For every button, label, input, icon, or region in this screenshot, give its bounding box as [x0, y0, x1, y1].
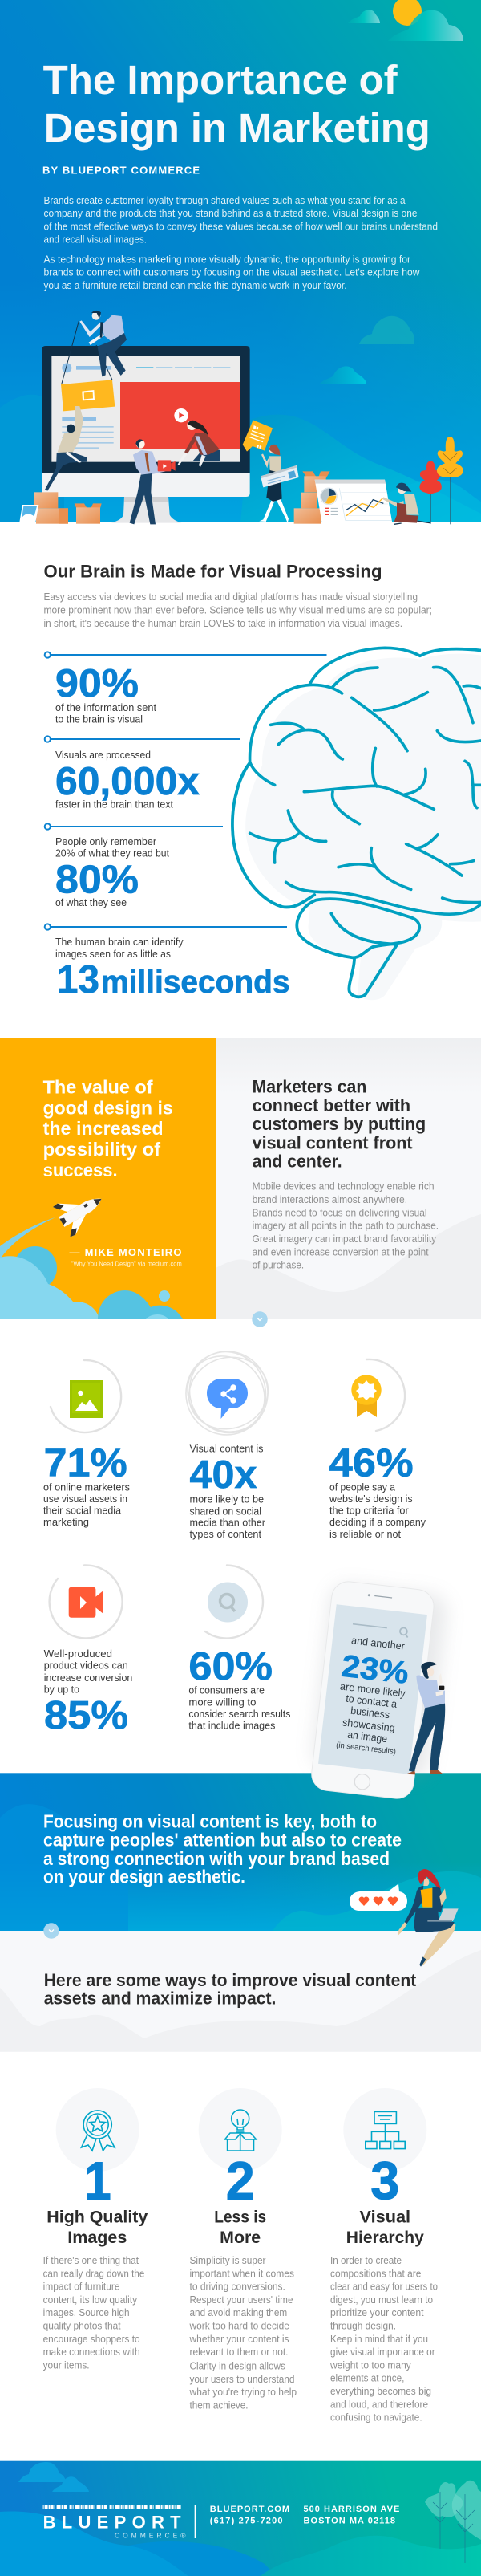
phone text: and another: [350, 1634, 406, 1652]
heading: assets and maximize impact.: [44, 1989, 276, 2009]
stat: 85%: [44, 1565, 132, 1737]
stat: 60%: [188, 1565, 291, 1732]
icon: sun: [393, 0, 422, 26]
phone text: (in search results): [336, 1741, 396, 1757]
tip body: and avoid making them: [189, 2306, 287, 2318]
stat: 80%: 20% of what they read but: [55, 847, 169, 859]
icon: rocket trail: [0, 1217, 55, 1259]
icon: video camera in ring: [50, 1565, 123, 1638]
panel: footer: [0, 2461, 481, 2576]
tip body: them achieve.: [189, 2399, 249, 2411]
stat: 71%: marketing: [43, 1516, 89, 1528]
contact: web and phone: [210, 2505, 289, 2525]
body: [253, 1180, 439, 1271]
figure: bearded man reaching: [45, 406, 87, 491]
callout text: on your design aesthetic.: [43, 1867, 245, 1887]
tip body: everything becomes big: [330, 2385, 431, 2397]
tip body: [329, 2254, 438, 2424]
tip title: [46, 2208, 148, 2247]
stat: 40x: media than other: [189, 1517, 266, 1529]
quote text: The value of: [43, 1077, 153, 1098]
contact: address: BOSTON MA 02118: [303, 2516, 395, 2525]
tip body: whether your content is: [189, 2333, 289, 2345]
figure: woman on laptop with hearts: [350, 1869, 459, 1967]
phone shadow: [312, 1583, 448, 1780]
figure: man leaning on phone: [406, 1662, 445, 1774]
illustration: woman, chart, trees: [243, 420, 463, 524]
tip body: compositions that are: [330, 2267, 421, 2279]
body: Great imagery can impact brand favorability: [253, 1233, 437, 1245]
body: of purchase.: [253, 1259, 304, 1271]
chart card: [315, 480, 392, 524]
tip body: make connections with: [43, 2346, 140, 2358]
tip body: digest, you must learn to: [330, 2294, 433, 2306]
contact: address: 500 HARRISON AVE: [303, 2505, 399, 2514]
text block: intro: you as a furniture retail brand can make this dynamic work in your favor.: [43, 279, 346, 291]
tip body: your items.: [43, 2359, 90, 2371]
tip body: Keep in mind that if you: [330, 2333, 428, 2345]
stat: 71%: of online marketers: [43, 1481, 130, 1493]
text block: brain intro: more prominent now than ever before. Science tells us why visual mediums are so popular;: [43, 603, 432, 616]
stat: 46%: deciding if a company: [329, 1516, 426, 1528]
stat: 60,000x: [45, 736, 240, 811]
stat: 80%: [45, 823, 223, 908]
heading: brain section: Our Brain is Made for Visual Processing: [43, 561, 382, 581]
stat: 40x: shared on social: [189, 1505, 261, 1517]
stat: 40x: Visual content is: [189, 1442, 264, 1454]
body: brand interactions almost anywhere.: [253, 1193, 407, 1205]
figure: woman kneeling: [178, 421, 220, 467]
stat: 13 milliseconds: images seen for as little as: [55, 948, 171, 960]
stat: 13 milliseconds: 13: [57, 958, 99, 1002]
callout text: a strong connection with your brand based: [43, 1848, 390, 1869]
tip body: elements at once,: [330, 2372, 404, 2384]
icon: hierarchy: [366, 2111, 405, 2149]
tip body: prioritize your content: [330, 2306, 424, 2318]
text block: intro: brands to connect with customers by focusing on the visual aesthetic. Let's explore how: [43, 266, 420, 278]
tip body: can really drag down the: [43, 2267, 144, 2279]
text block: brain intro: Easy access via devices to social media and digital platforms has made visual storytelling: [43, 591, 418, 603]
panel: improve heading: [0, 1923, 481, 2052]
icon: red video panel: [120, 382, 240, 449]
illustration: brain: [232, 648, 481, 1000]
tip body: encourage shoppers to: [43, 2333, 140, 2345]
icon: monitor: [42, 346, 250, 497]
tip body: In order to create: [330, 2254, 402, 2266]
tip 2: less is more: 2: [226, 2151, 255, 2212]
tip body: Clarity in design allows: [189, 2360, 285, 2372]
tip title: Hierarchy: [346, 2229, 424, 2247]
icon: share bubble in scribble: [172, 1340, 280, 1448]
icon: footer plants: [425, 2481, 481, 2563]
stat: 60,000x: 60,000x: [55, 760, 200, 803]
tip title: [214, 2208, 266, 2247]
stat: 46%: the top criteria for: [329, 1505, 409, 1517]
title: The Importance of: [43, 57, 398, 103]
tip body: [189, 2254, 297, 2411]
tip title: [346, 2208, 424, 2247]
stat: 85%: 85%: [44, 1694, 128, 1737]
stat: 46%: of people say a: [329, 1481, 396, 1493]
stat: 80%: of what they see: [55, 896, 127, 908]
stat: 85%: product videos can: [44, 1659, 128, 1671]
stat: 46%: is reliable or not: [329, 1528, 401, 1540]
icon: monitor stand: [111, 497, 182, 523]
tip body: your users to understand: [189, 2373, 295, 2385]
stat: 46%: [329, 1359, 426, 1540]
stat: 85%: Well-produced: [44, 1648, 112, 1660]
stat: 80%: People only remember: [55, 835, 157, 847]
figure: man on top of monitor: [79, 311, 127, 376]
stat: 85%: increase conversion: [44, 1672, 132, 1684]
icon: cloud top large: [388, 10, 463, 41]
phone text: are more likely: [339, 1680, 406, 1700]
icon: cloud mid lower: [319, 366, 366, 384]
figure: man with camera: [130, 439, 176, 524]
stat: 40x: [172, 1340, 280, 1540]
stat: 40x: 40x: [189, 1453, 257, 1497]
icon: award: [82, 2111, 115, 2151]
quote text: good design is: [43, 1098, 173, 1119]
phone text: showcasing: [342, 1716, 396, 1734]
tip body: content, its low quality: [43, 2294, 138, 2306]
panel: marketers: [216, 1038, 481, 1327]
tip body: weight to too many: [329, 2359, 411, 2371]
figure: woman with card: [259, 445, 299, 523]
text block: brain intro: in short, it's because the human brain LOVES to take in information via visual images.: [43, 617, 402, 629]
stat: 71%: [43, 1360, 130, 1528]
phone text: business: [350, 1704, 390, 1721]
tip body: confusing to navigate.: [330, 2411, 422, 2424]
stat: 60%: more willing to: [188, 1696, 256, 1708]
callout text: [43, 1810, 402, 1887]
stat: 90%: of the information sent: [55, 701, 156, 713]
tip body: Respect your users' time: [189, 2294, 293, 2306]
figure: seated woman: [382, 483, 430, 524]
quote text: [43, 1077, 173, 1180]
tip body: quality photos that: [43, 2319, 121, 2332]
heading: customers by putting: [253, 1114, 426, 1134]
icon: stacked boxes: [34, 492, 68, 524]
illustration: monitor with people: [19, 311, 250, 524]
icon: yellow quote bubble: [243, 420, 273, 452]
icon: search in ring: [205, 1565, 263, 1638]
tip body: through design.: [330, 2319, 396, 2332]
text block: intro: and recall visual images.: [43, 233, 147, 246]
stat: 90%: 90%: [55, 662, 139, 705]
stat: 60%: consider search results: [188, 1708, 291, 1720]
heading: connect better with: [253, 1095, 410, 1115]
callout text: Focusing on visual content is key, both to: [43, 1810, 377, 1831]
phone with stat: [309, 1580, 448, 1800]
icon: medal in ring: [351, 1359, 405, 1431]
callout text: capture peoples' attention but also to create: [43, 1830, 402, 1851]
phone text: an image: [347, 1729, 388, 1745]
icon: chevron button: [43, 1923, 59, 1939]
contact: web and phone: (617) 275-7200: [210, 2516, 282, 2525]
tip body: images. Source high: [43, 2306, 130, 2318]
quote text: the increased: [43, 1118, 164, 1139]
icon: cloud top small: [348, 10, 380, 23]
attribution: "Why You Need Design" via medium.com: [71, 1260, 182, 1268]
tip title: High Quality: [46, 2208, 148, 2227]
stat: 40x: more likely to be: [189, 1493, 264, 1505]
tip title: Visual: [360, 2208, 410, 2227]
byline: BY BLUEPORT COMMERCE: [42, 165, 200, 177]
text block: intro: As technology makes marketing more visually dynamic, the opportunity is growing for: [43, 254, 411, 266]
logo: Blueport Commerce: COMMERCE®: [115, 2531, 186, 2539]
tip body: to driving conversions.: [189, 2281, 285, 2293]
heading: visual content front: [253, 1133, 413, 1153]
logo: Blueport Commerce: BLUEPORT: [43, 2512, 181, 2532]
brain outline upper: [236, 648, 481, 914]
heading: and center.: [253, 1151, 342, 1172]
tip body: relevant to them or not.: [189, 2346, 289, 2358]
attribution: — MIKE MONTEIRO: [69, 1246, 181, 1258]
body: Mobile devices and technology enable rich: [253, 1180, 435, 1193]
stat: 80%: 80%: [55, 859, 139, 902]
icon: red leaf tree: [420, 461, 442, 524]
stat: 46%: website's design is: [329, 1493, 413, 1505]
text block: brain intro: [43, 591, 432, 629]
stat: 13 milliseconds: [45, 924, 289, 1002]
tip body: clear and easy for users to: [330, 2281, 438, 2293]
phone text: [332, 1633, 412, 1757]
stat: 46%: 46%: [329, 1441, 414, 1485]
brain fill: [245, 654, 481, 1000]
icon: chevron button: [252, 1311, 268, 1327]
tip title: Images: [67, 2229, 127, 2247]
panel: quote: [0, 1038, 216, 1319]
icon: clouds: [0, 1246, 183, 1319]
tip 2: less is more: [189, 2088, 297, 2411]
icon: open box: [75, 503, 102, 524]
contact: web and phone: BLUEPORT.COM: [210, 2505, 289, 2514]
tip 3: visual hierarchy: 3: [370, 2151, 399, 2212]
stat: 71%: 71%: [44, 1441, 127, 1485]
text block: intro: of the most effective ways to convey these values because of how well our brains understand: [43, 220, 438, 233]
contact: address: [303, 2505, 399, 2525]
tip body: impact of furniture: [43, 2281, 120, 2293]
stat: 60,000x: Visuals are processed: [55, 749, 151, 761]
tip 1: high quality images: [43, 2088, 148, 2371]
icon: framed picture: [19, 505, 38, 524]
stat: 60,000x: faster in the brain than text: [55, 798, 173, 811]
tip body: [43, 2254, 144, 2371]
icon: bulb in box: [224, 2110, 257, 2151]
body: and even increase conversion at the point: [253, 1245, 429, 1258]
icon: box stack right: [294, 471, 330, 524]
stat: 60%: 60%: [188, 1645, 273, 1688]
tip title: Less is: [214, 2208, 266, 2227]
quote text: possibility of: [43, 1139, 160, 1160]
brain outline lower: [232, 762, 419, 997]
text block: intro: company and the products that you stand behind as a trusted store. Visual design is one: [43, 207, 417, 219]
stat: 60%: that include images: [188, 1720, 276, 1732]
icon: speech bubble with hearts: [350, 1884, 407, 1911]
tip 1: high quality images: 1: [84, 2151, 111, 2212]
phone text: 23%: [340, 1649, 410, 1691]
tip body: Simplicity is super: [189, 2254, 266, 2266]
stat: 60%: of consumers are: [188, 1684, 265, 1696]
stat: 85%: by up to: [44, 1683, 79, 1695]
tip body: give visual importance or: [330, 2346, 435, 2358]
heading: Here are some ways to improve visual content: [44, 1970, 417, 1990]
phone body: [309, 1580, 435, 1800]
icon: rocket: [52, 1183, 111, 1237]
body: Brands need to focus on delivering visual: [253, 1206, 427, 1218]
stat: 71%: use visual assets in: [43, 1493, 127, 1505]
quote text: success.: [43, 1160, 118, 1180]
tip body: important when it comes: [189, 2267, 294, 2279]
tip 3: visual hierarchy: [329, 2088, 438, 2424]
icon: image in ring: [51, 1360, 121, 1432]
stat: 90%: to the brain is visual: [55, 713, 143, 725]
attribution: [69, 1246, 182, 1268]
icon: yellow leaf tree: [437, 437, 463, 524]
stat: 90%: [45, 652, 326, 725]
title: Design in Marketing: [44, 105, 430, 151]
icon: footer clouds: [18, 2462, 89, 2492]
stat: 71%: their social media: [43, 1505, 122, 1517]
tip body: If there's one thing that: [43, 2254, 139, 2266]
body: imagery at all points in the path to purchase.: [253, 1220, 439, 1232]
heading: Marketers can: [253, 1077, 366, 1097]
phone text: to contact a: [346, 1692, 398, 1710]
icon: hanging yellow image card: [61, 321, 115, 411]
panel: teal callout band: [0, 1773, 481, 1931]
icon: cloud mid upper: [359, 316, 414, 344]
tip body: work too hard to decide: [189, 2319, 289, 2332]
heading: [253, 1077, 426, 1172]
text block: intro: [43, 194, 438, 291]
panel: hero header: [0, 0, 481, 524]
heading: [44, 1970, 417, 2009]
tip title: More: [220, 2229, 261, 2247]
text block: intro: Brands create customer loyalty through shared values such as what you stand for as a: [43, 194, 406, 206]
stat: 13 milliseconds: milliseconds: [101, 965, 290, 1000]
tip body: and loud, and therefore: [330, 2398, 428, 2410]
title: [43, 57, 430, 151]
logo: Blueport Commerce: [43, 2507, 186, 2539]
stat: 13 milliseconds: The human brain can identify: [55, 936, 184, 948]
tip body: what you're trying to help: [189, 2386, 297, 2398]
divider: [194, 2505, 196, 2538]
stat: 40x: types of content: [189, 1528, 261, 1540]
